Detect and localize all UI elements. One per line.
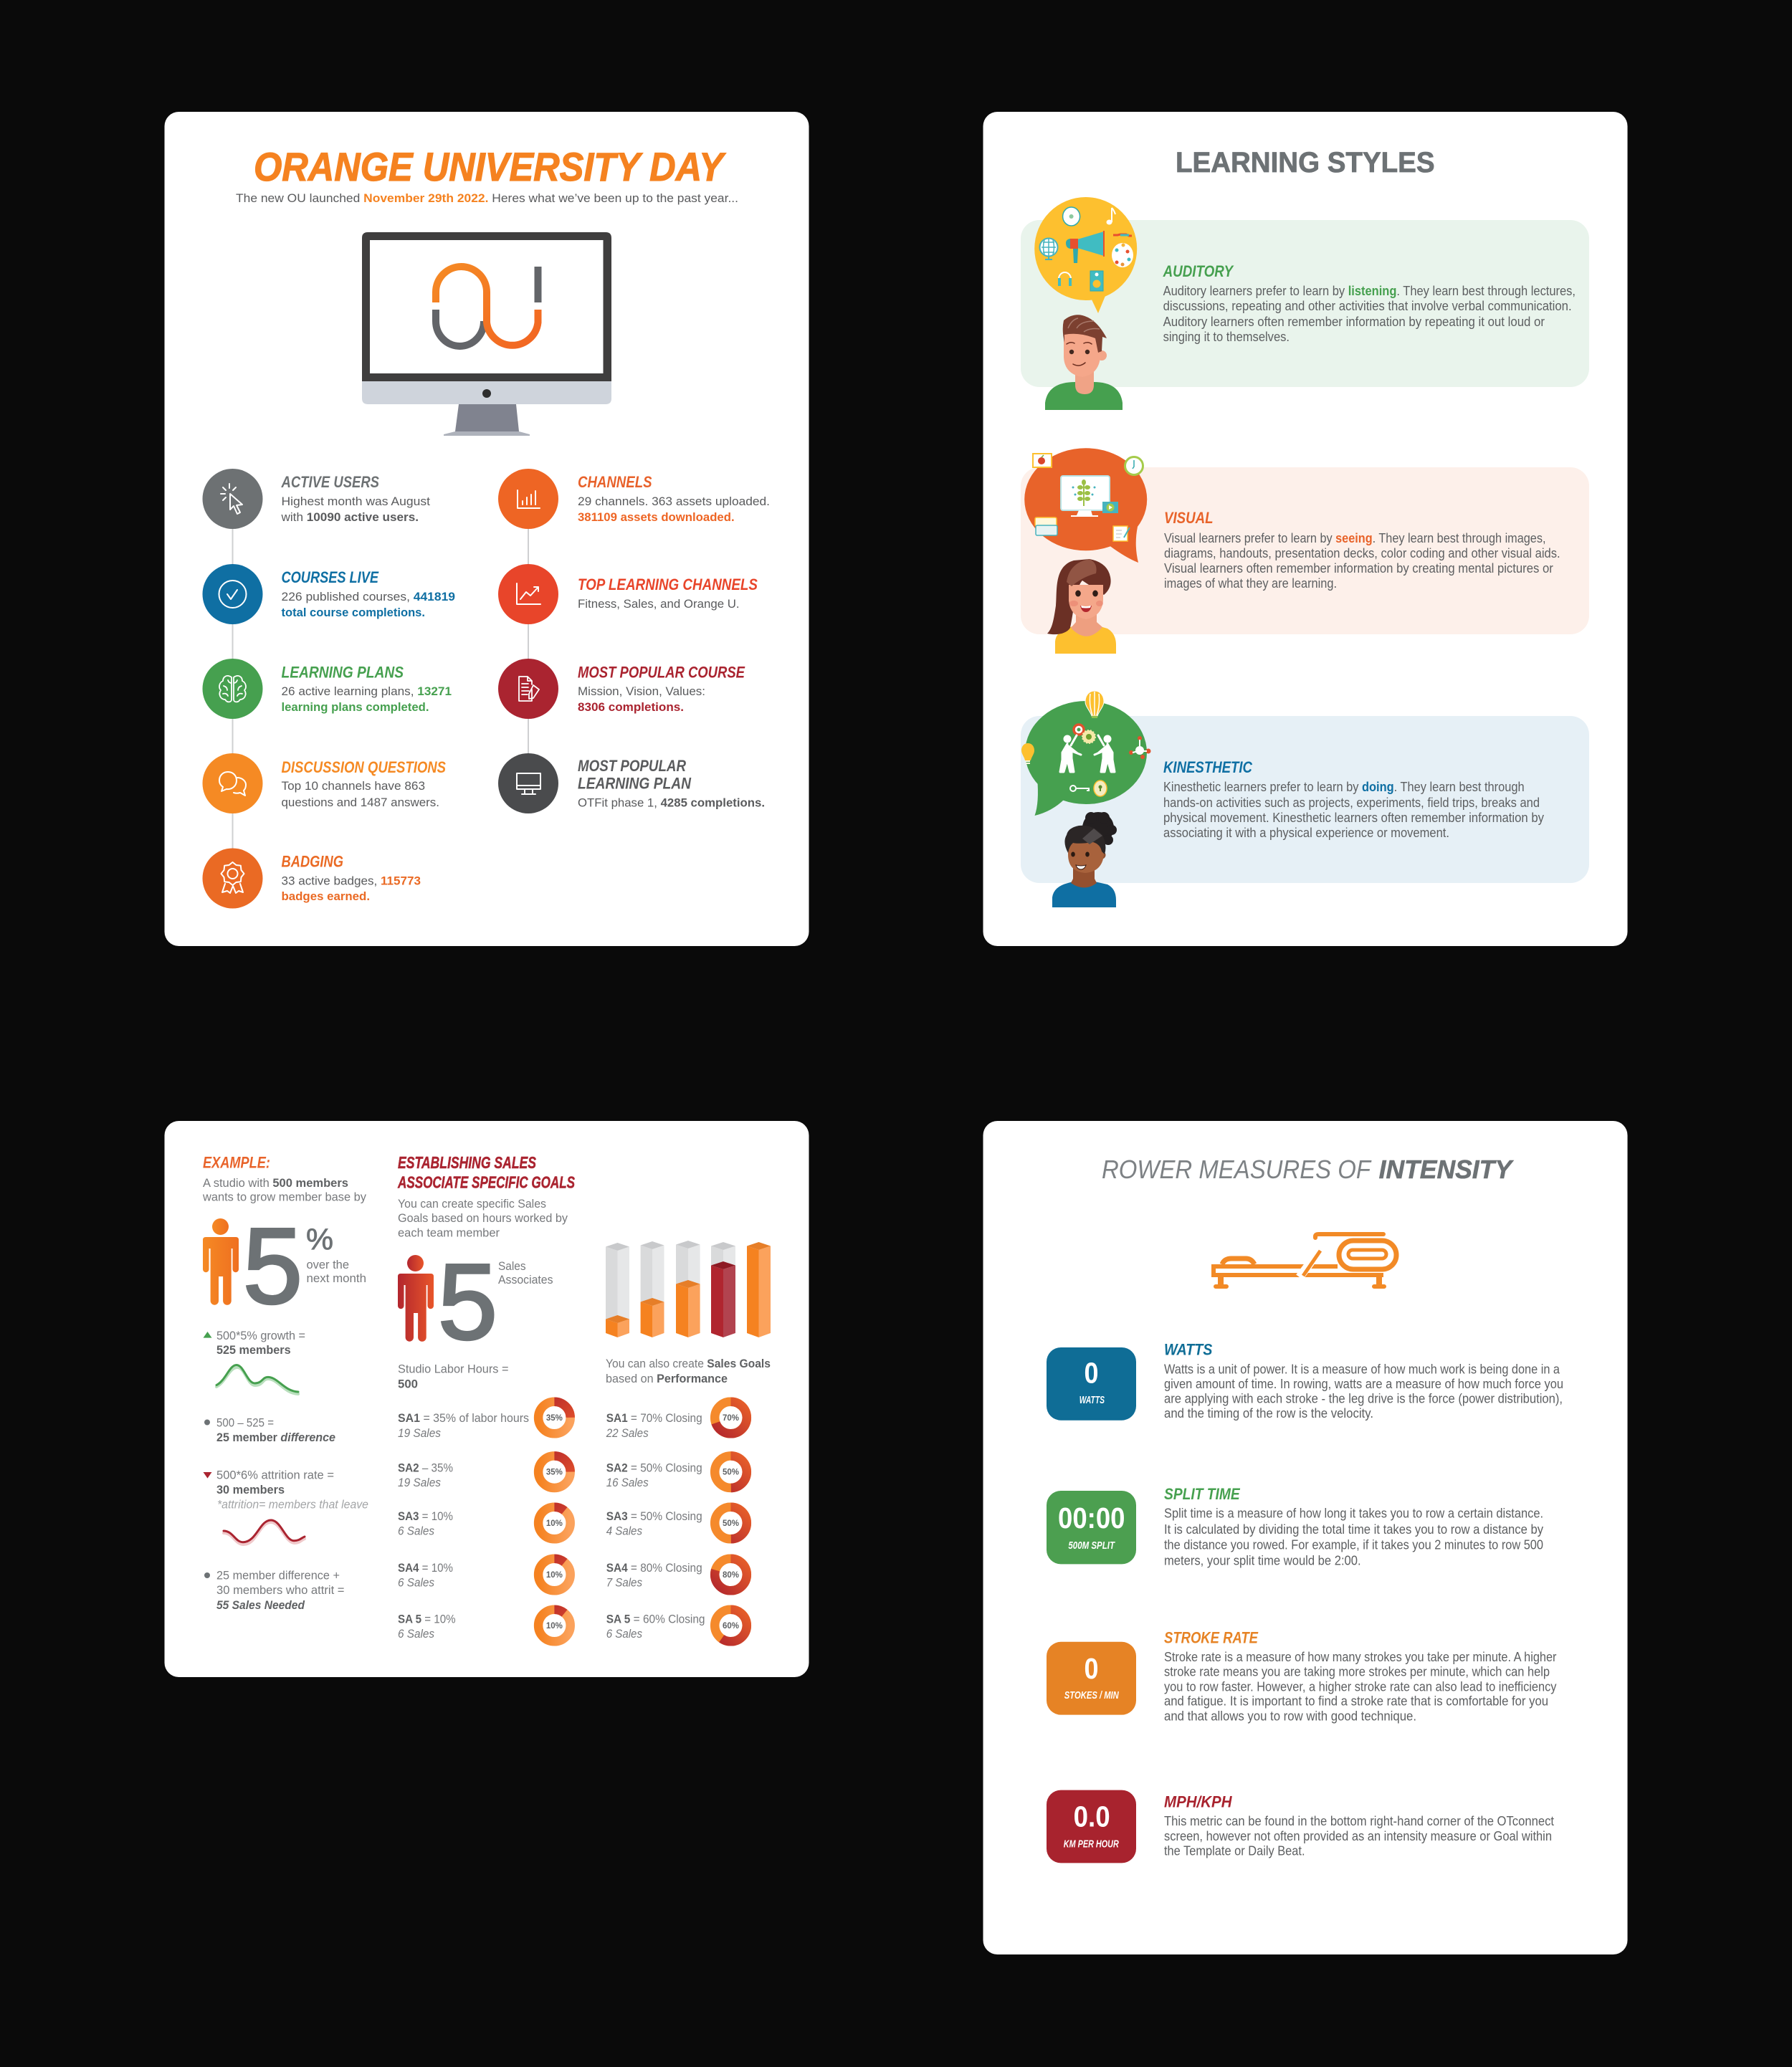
- stat: active users: Highest month was August: [281, 495, 430, 508]
- stat: channels: [498, 469, 770, 529]
- stat: active users: with 10090 active users.: [280, 510, 419, 524]
- metric: mph kph: MPH/KPH: [1164, 1793, 1233, 1811]
- donut: 10 percent: 10%: [546, 1519, 563, 1528]
- row: SA3 labor hours: [398, 1507, 571, 1539]
- metric: watts: [1047, 1341, 1563, 1421]
- donut: 10 percent: [538, 1559, 571, 1590]
- stat: channels: CHANNELS: [578, 473, 652, 491]
- text: kinesthetic description: hands-on activities such as projects, experiments, field trips, breaks and: [1163, 796, 1540, 810]
- stat: discussion questions: DISCUSSION QUESTIONS: [281, 758, 446, 776]
- row: SA4 labor hours: 6 Sales: [398, 1576, 434, 1590]
- text: visual description: [1164, 531, 1560, 591]
- text: studio labor hours: Studio Labor Hours =: [398, 1362, 509, 1376]
- metric: watts: and the timing of the row is the velocity.: [1164, 1406, 1373, 1421]
- icon: red person: [398, 1255, 434, 1342]
- panel: rower measures of intensity: [983, 1121, 1627, 1954]
- text: example intro: A studio with 500 members: [203, 1176, 348, 1190]
- big number: 5 percent: 5: [243, 1206, 302, 1326]
- metric: watts: WATTS: [1164, 1341, 1213, 1359]
- heading: example: EXAMPLE:: [203, 1154, 270, 1172]
- stat: most popular learning plan: MOST POPULAR: [578, 757, 686, 775]
- row: SA3 closing: SA3 = 50% Closing: [606, 1509, 702, 1523]
- metric: split time: the distance you rowed. For example, if it takes you 2 minutes to row 500: [1164, 1538, 1543, 1552]
- text: studio labor hours: [398, 1362, 509, 1391]
- panel: sales goals example: [165, 1121, 809, 1677]
- illustration: woman with blue top: [1052, 812, 1117, 907]
- text: goals intro: You can create specific Sales: [398, 1197, 546, 1211]
- stat: learning plans: 26 active learning plans, 13271: [281, 684, 452, 698]
- row: SA3 labor hours: 6 Sales: [398, 1524, 434, 1538]
- donut: 10 percent: [538, 1507, 571, 1539]
- row: SA5 closing: 6 Sales: [606, 1627, 642, 1641]
- stat: top learning channels: TOP LEARNING CHANNELS: [578, 576, 758, 593]
- metric: stroke rate: [1047, 1628, 1557, 1723]
- row: SA4 labor hours: SA4 = 10%: [398, 1561, 453, 1575]
- row: SA1 labor hours: SA1 = 35% of labor hours: [398, 1411, 529, 1425]
- icon: check circle: [202, 564, 262, 624]
- stat: channels: 29 channels. 363 assets uploaded.: [578, 495, 770, 508]
- text: kinesthetic description: associating it with a physical experience or movement.: [1163, 826, 1449, 840]
- row: SA5 closing: [606, 1610, 747, 1641]
- text: goals intro: Goals based on hours worked by: [398, 1211, 568, 1225]
- sales needed calculation: 30 members who attrit =: [216, 1583, 345, 1597]
- big number: 5 sales associates: [438, 1241, 553, 1362]
- stat: active users: ACTIVE USERS: [281, 473, 379, 491]
- donut: 60 percent: [715, 1610, 747, 1641]
- icon: rowing machine: [1214, 1234, 1396, 1286]
- panel: Learning Styles: [983, 112, 1627, 946]
- icon: orange person: [203, 1218, 239, 1305]
- donut: 50 percent: [715, 1507, 747, 1539]
- stat: badging: 33 active badges, 115773: [281, 874, 421, 887]
- donut: 35 percent: 35%: [546, 1469, 563, 1477]
- row: SA3 labor hours: SA3 = 10%: [398, 1509, 453, 1523]
- watts badge: WATTS: [1080, 1394, 1105, 1406]
- donut: 10 percent: [538, 1610, 571, 1641]
- metric: split time: [1047, 1485, 1543, 1568]
- stroke rate badge: [1047, 1642, 1136, 1715]
- metric: split time: Split time is a measure of how long it takes you to row a certain distance.: [1164, 1507, 1543, 1521]
- stat: active users: [202, 469, 430, 529]
- metric: watts: Watts is a unit of power. It is a measure of how much work is being done in a: [1164, 1362, 1560, 1377]
- stat: courses live: 226 published courses, 441819: [281, 590, 455, 603]
- metric: split time: SPLIT TIME: [1164, 1485, 1241, 1503]
- text: visual description: Visual learners prefer to learn by seeing. They learn best through images,: [1164, 531, 1545, 545]
- icon: computer screen: [498, 753, 558, 813]
- stat: most popular course: MOST POPULAR COURSE: [578, 664, 745, 682]
- stat: channels: 381109 assets downloaded.: [578, 510, 735, 524]
- text: example intro: wants to grow member base by: [202, 1190, 366, 1204]
- donut: 70 percent: 70%: [723, 1414, 739, 1423]
- attrition calculation: 500*6% attrition rate =: [216, 1468, 334, 1482]
- stat: most popular course: [498, 659, 745, 719]
- metric: stroke rate: Stroke rate is a measure of how many strokes you take per minute. A higher: [1164, 1650, 1557, 1664]
- stat: badging: [202, 849, 421, 909]
- row: SA2 labor hours: 19 Sales: [398, 1476, 441, 1489]
- metric: stroke rate: stroke rate means you are taking more strokes per minute, which can help: [1164, 1665, 1550, 1679]
- donut: 50 percent: 50%: [723, 1469, 739, 1477]
- row: SA5 labor hours: [398, 1610, 571, 1641]
- stat: top learning channels: [498, 564, 758, 624]
- text: example intro: [202, 1176, 366, 1204]
- card: kinesthetic: [1021, 691, 1589, 907]
- heading: rower measures of intensity: INTENSITY: [1379, 1155, 1514, 1184]
- stroke rate badge: 0: [1084, 1652, 1098, 1685]
- text: visual description: images of what they are learning.: [1164, 576, 1337, 591]
- donut: 10 percent: 10%: [546, 1622, 563, 1631]
- icon: yellow speech bubble with sound icons: [1034, 197, 1137, 313]
- row: SA4 labor hours: [398, 1559, 571, 1590]
- big number: 5 percent: next month: [307, 1271, 366, 1285]
- stat: courses live: COURSES LIVE: [281, 568, 379, 586]
- donut: 60 percent: 60%: [723, 1622, 739, 1631]
- stat: discussion questions: [202, 753, 446, 813]
- watts badge: 0: [1084, 1356, 1098, 1389]
- speed badge: 0.0: [1074, 1800, 1110, 1833]
- metric: stroke rate: you to row faster. However, a higher stroke rate can also lead to inefficiency: [1164, 1679, 1557, 1694]
- sales needed calculation: 55 Sales Needed: [216, 1598, 305, 1612]
- stat: most popular learning plan: OTFit phase 1, 4285 completions.: [578, 796, 765, 810]
- metric: watts: given amount of time. In rowing, watts are a measure of how much force you: [1164, 1377, 1563, 1391]
- metric: watts: are applying with each stroke - the leg drive is the force (power distribution),: [1164, 1392, 1563, 1406]
- panel: Orange University Day: [165, 112, 809, 946]
- row: SA1 labor hours: 19 Sales: [398, 1426, 441, 1440]
- donut: 50 percent: 50%: [723, 1519, 739, 1528]
- difference calculation: [204, 1416, 335, 1444]
- metric: stroke rate: and that allows you to row with good technique.: [1164, 1709, 1416, 1723]
- text: performance goals: You can also create Sales Goals: [606, 1357, 771, 1370]
- icon: document and pen: [498, 659, 558, 719]
- stat: most popular course: 8306 completions.: [578, 700, 684, 714]
- stat: learning plans: LEARNING PLANS: [281, 664, 404, 682]
- difference calculation: 25 member difference: [216, 1431, 335, 1444]
- metric: mph kph: the Template or Daily Beat.: [1164, 1843, 1305, 1858]
- growth calculation: 500*5% growth =: [216, 1329, 305, 1342]
- speed badge: [1047, 1790, 1136, 1863]
- heading: establishing sales associate specific goals: ESTABLISHING SALES: [398, 1153, 536, 1172]
- stat: discussion questions: questions and 1487 answers.: [281, 796, 439, 809]
- metric: mph kph: [1047, 1790, 1554, 1863]
- row: SA2 closing: 16 Sales: [606, 1476, 649, 1489]
- text: auditory description: [1163, 284, 1576, 344]
- row: SA3 closing: [606, 1507, 747, 1539]
- chart: 3D bars: [606, 1241, 771, 1337]
- text: kinesthetic description: Kinesthetic learners prefer to learn by doing. They learn best through: [1163, 780, 1525, 794]
- subtitle: The new OU launched November 29th 2022. Heres what we’ve been up to the past year...: [236, 191, 738, 205]
- heading: establishing sales associate specific goals: [397, 1153, 575, 1192]
- stat: most popular learning plan: LEARNING PLAN: [578, 774, 692, 793]
- text: auditory description: Auditory learners prefer to learn by listening. They learn best through lectures,: [1163, 284, 1576, 298]
- text: performance goals: based on Performance: [606, 1372, 728, 1385]
- split time badge: 500M SPLIT: [1068, 1539, 1115, 1552]
- watts badge: [1047, 1347, 1136, 1421]
- icon: line chart: [498, 564, 558, 624]
- attrition calculation: [204, 1468, 368, 1512]
- row: SA2 labor hours: SA2 – 35%: [398, 1461, 453, 1475]
- text: kinesthetic description: physical movement. Kinesthetic learners often remember information by: [1163, 811, 1544, 825]
- stat: learning plans: [202, 659, 452, 719]
- row: SA5 labor hours: 6 Sales: [398, 1627, 434, 1641]
- row: SA2 labor hours: [398, 1456, 571, 1489]
- split time badge: [1047, 1491, 1136, 1564]
- card: auditory: [1021, 197, 1589, 410]
- text: visual description: diagrams, handouts, presentation decks, color coding and other visual aids.: [1164, 546, 1560, 560]
- row: SA1 closing: SA1 = 70% Closing: [606, 1411, 702, 1425]
- donut: 35 percent: 35%: [546, 1414, 563, 1423]
- icon: badge: [202, 849, 262, 909]
- illustration: woman with yellow top: [1047, 559, 1116, 654]
- text: goals intro: [398, 1197, 568, 1240]
- card: visual: [1021, 448, 1589, 654]
- attrition calculation: 30 members: [216, 1483, 285, 1496]
- icon: desktop monitor with OU logo: [362, 232, 611, 436]
- label: auditory: AUDITORY: [1163, 262, 1234, 280]
- donut: 70 percent: [715, 1402, 747, 1433]
- icon: green speech bubble with activity icons: [1021, 691, 1151, 816]
- stroke rate badge: STOKES / MIN: [1064, 1689, 1120, 1701]
- stat: most popular course: Mission, Vision, Values:: [578, 684, 705, 698]
- stat: discussion questions: Top 10 channels have 863: [281, 779, 425, 793]
- row: SA2 closing: SA2 = 50% Closing: [606, 1461, 702, 1475]
- chart: green growth curve: [216, 1365, 298, 1394]
- text: auditory description: singing it to themselves.: [1163, 330, 1290, 344]
- attrition calculation: *attrition= members that leave: [217, 1498, 368, 1512]
- heading: rower measures of intensity: ROWER MEASURES OF: [1102, 1155, 1372, 1184]
- icon: cursor: [202, 469, 262, 529]
- donut: 35 percent: [538, 1402, 571, 1433]
- chart: red attrition curve: [224, 1520, 305, 1545]
- big number: 5 sales associates: Associates: [498, 1273, 553, 1286]
- title: ORANGE UNIVERSITY DAY: [254, 144, 726, 189]
- stat: badging: badges earned.: [281, 889, 370, 903]
- sales needed calculation: 25 member difference +: [216, 1568, 340, 1583]
- text: performance goals: [606, 1357, 771, 1385]
- donut: 35 percent: [538, 1456, 571, 1488]
- stat: courses live: [202, 564, 455, 624]
- stat: badging: BADGING: [281, 853, 343, 870]
- icon: chat bubbles: [202, 753, 262, 813]
- icon: orange speech bubble with visual icons: [1024, 448, 1147, 563]
- heading: learning styles: LEARNING STYLES: [1176, 147, 1435, 178]
- row: SA5 labor hours: SA 5 = 10%: [398, 1613, 456, 1626]
- heading: establishing sales associate specific goals: ASSOCIATE SPECIFIC GOALS: [397, 1173, 575, 1192]
- text: kinesthetic description: [1163, 780, 1544, 840]
- row: SA1 closing: [606, 1402, 747, 1440]
- label: kinesthetic: KINESTHETIC: [1163, 758, 1253, 776]
- speed badge: KM PER HOUR: [1064, 1838, 1119, 1851]
- stat: courses live: total course completions.: [281, 606, 425, 619]
- stat: top learning channels: Fitness, Sales, and Orange U.: [578, 597, 740, 611]
- donut: 10 percent: 10%: [546, 1571, 563, 1580]
- metric: split time: It is calculated by dividing the total time it takes you to row a distance by: [1164, 1522, 1543, 1537]
- metric: stroke rate: and fatigue. It is important to find a stroke rate that is comfortable for you: [1164, 1694, 1548, 1709]
- icon: bar chart: [498, 469, 558, 529]
- big number: 5 percent: over the: [307, 1258, 349, 1271]
- row: SA4 closing: SA4 = 80% Closing: [606, 1561, 702, 1575]
- big number: 5 percent: %: [306, 1223, 333, 1256]
- metric: stroke rate: STROKE RATE: [1164, 1628, 1259, 1646]
- row: SA4 closing: [606, 1559, 747, 1590]
- label: visual: VISUAL: [1164, 509, 1214, 527]
- growth calculation: [204, 1329, 305, 1357]
- connector lines: [232, 529, 528, 849]
- row: SA5 closing: SA 5 = 60% Closing: [606, 1613, 705, 1626]
- text: studio labor hours: 500: [398, 1378, 418, 1391]
- row: SA1 labor hours: [398, 1402, 571, 1440]
- metric: split time: meters, your split time would be 2:00.: [1164, 1554, 1361, 1568]
- donut: 80 percent: [715, 1559, 747, 1590]
- text: auditory description: discussions, repeating and other activities that involve verbal communication.: [1163, 299, 1572, 313]
- row: SA2 closing: [606, 1456, 747, 1489]
- big number: 5 sales associates: 5: [438, 1241, 497, 1362]
- illustration: man: [1045, 315, 1123, 410]
- row: SA4 closing: 7 Sales: [606, 1576, 642, 1590]
- sales needed calculation: [204, 1568, 345, 1612]
- row: SA3 closing: 4 Sales: [606, 1524, 642, 1538]
- icon: brain: [202, 659, 262, 719]
- split time badge: 00:00: [1058, 1502, 1125, 1534]
- metric: mph kph: This metric can be found in the bottom right-hand corner of the OTconnect: [1164, 1814, 1554, 1828]
- stat: learning plans: learning plans completed.: [281, 700, 429, 714]
- metric: mph kph: screen, however not often provided as an intensity measure or Goal within: [1164, 1829, 1552, 1843]
- text: goals intro: each team member: [398, 1226, 500, 1240]
- big number: 5 percent: [243, 1206, 366, 1326]
- stat: most popular learning plan: [498, 753, 765, 813]
- difference calculation: 500 – 525 =: [216, 1416, 274, 1430]
- text: auditory description: Auditory learners often remember information by repeating it out loud or: [1163, 315, 1545, 329]
- big number: 5 sales associates: Sales: [498, 1259, 526, 1273]
- donut: 50 percent: [715, 1456, 747, 1488]
- growth calculation: 525 members: [216, 1343, 291, 1357]
- text: visual description: Visual learners often remember information by creating mental pictures or: [1164, 561, 1553, 576]
- row: SA1 closing: 22 Sales: [606, 1426, 649, 1440]
- donut: 80 percent: 80%: [723, 1571, 739, 1580]
